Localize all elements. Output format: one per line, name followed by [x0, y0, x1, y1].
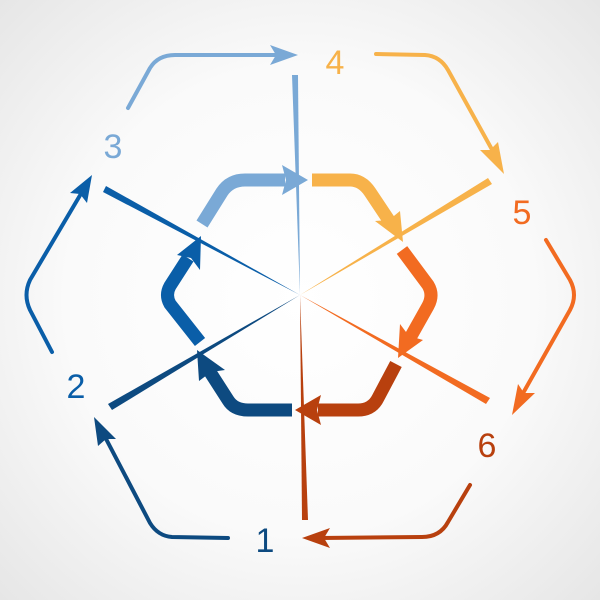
inner arrow: blue: [168, 236, 201, 342]
arrow: 6 to 1: [302, 485, 470, 548]
inner arrow: orange: [398, 250, 431, 358]
spokes: [103, 75, 492, 520]
labels: 4: [326, 44, 344, 82]
labels: 5: [513, 194, 531, 232]
labels: 1: [256, 522, 274, 560]
arrow: 3 to 4: [128, 45, 298, 108]
arrow: 1 to 2: [94, 417, 228, 538]
inner arrow: light blue: [202, 165, 308, 224]
outer arrows: [26, 45, 574, 548]
inner arrow: dark orange: [295, 364, 396, 425]
inner arrow: dark blue: [197, 350, 292, 410]
arrow: 4 to 5: [376, 54, 504, 174]
labels: [67, 44, 531, 560]
inner arrow: yellow: [312, 180, 403, 242]
labels: 6: [478, 427, 496, 465]
arrow: 5 to 6: [512, 240, 574, 415]
labels: 3: [104, 128, 122, 166]
inner hexagon arrows: [168, 165, 431, 425]
labels: 2: [67, 368, 85, 406]
arrow: 2 to 3: [26, 175, 92, 352]
